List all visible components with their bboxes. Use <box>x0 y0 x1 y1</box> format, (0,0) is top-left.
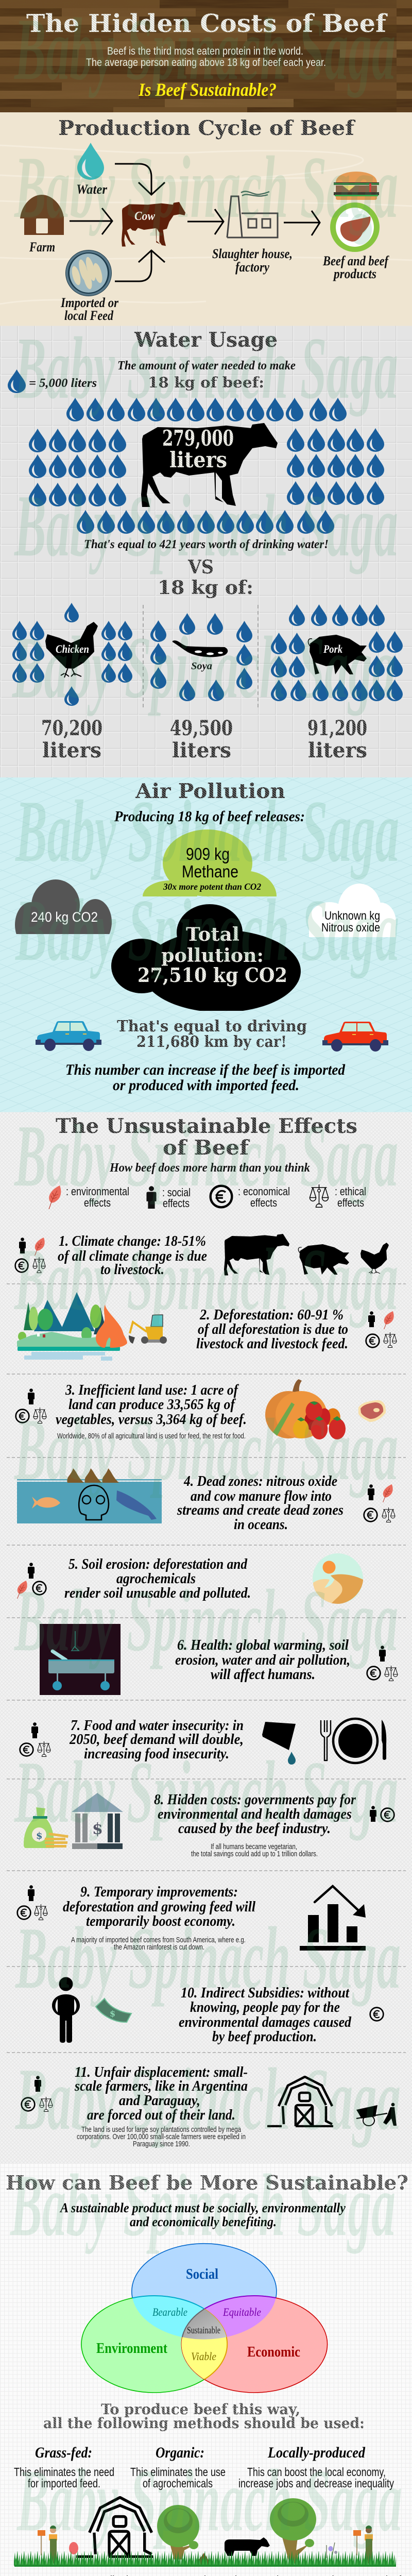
effect 10: indirect subsidies: 10. Indirect Subsidies: without <box>181 1985 350 2001</box>
intro text <box>59 2200 346 2229</box>
effect 7: food and water insecurity: increasing food insecurity. <box>84 1746 229 1762</box>
subheading: How beef does more harm than you think <box>109 1161 310 1175</box>
method: grass-fed: Grass-fed: <box>35 2444 92 2461</box>
method: locally-produced: Locally-produced <box>267 2444 366 2461</box>
subtitle question: Is Beef Sustainable? <box>138 79 277 100</box>
effect 4: dead zones <box>17 1468 395 1533</box>
effect 6: health <box>40 1624 398 1695</box>
effect 8: hidden costs: the total savings could add up to 1 trillion dollars. <box>191 1850 318 1858</box>
panel: unsustainable effects <box>0 1112 412 2164</box>
cloud: total pollution <box>111 904 301 1012</box>
arrow: factory to beef <box>284 211 320 235</box>
legend: effect types: effects <box>84 1196 111 1209</box>
icon: bank <box>72 1793 123 1849</box>
intro text: The average person eating above 18 kg of beef each year. <box>86 57 326 69</box>
arrow: farm to cow <box>70 208 112 234</box>
effect 1: climate change <box>15 1233 389 1278</box>
arrow: feed to cow <box>115 250 165 281</box>
effect 2: deforestation: 2. Deforestation: 60-91 % <box>199 1307 344 1323</box>
icon: money bag: $ <box>36 1831 43 1841</box>
subheading: 18 kg of beef: <box>148 374 264 391</box>
cloud: methane: 30x more potent than CO2 <box>163 882 261 892</box>
legend: effect types: : social <box>162 1186 191 1199</box>
stat: pork liters <box>307 716 367 762</box>
icon: steak <box>358 1400 386 1422</box>
effect 11: unfair displacement: The land is used for large soy plantations controlled by mega <box>81 2125 241 2134</box>
panel: production cycle <box>0 112 412 326</box>
chart: sustainability venn diagram: Bearable <box>152 2306 187 2318</box>
subheading: 18 kg of: 18 kg of: <box>158 577 253 599</box>
arrow: water to cow <box>115 164 165 195</box>
label: cow: Cow <box>134 210 156 223</box>
method: pasture-raised <box>12 2573 401 2576</box>
heading <box>56 1114 357 1160</box>
icon: banknote: $ <box>110 2009 115 2019</box>
pictogram: soya water <box>150 613 252 701</box>
legend: drop value <box>8 369 97 393</box>
legend: effect types: : economical <box>238 1185 290 1198</box>
icon: blue car <box>36 1021 101 1051</box>
icon: digger <box>129 1315 167 1344</box>
pictogram: soya water: Soya <box>191 660 212 672</box>
cloud: nitrous oxide: Unknown kg <box>324 909 380 922</box>
effect 10: indirect subsidies: knowing, people pay for the <box>190 1999 340 2015</box>
icon: farmer right <box>353 2526 373 2564</box>
effect 9: temporary improvements: the Amazon rainforest is cut down. <box>114 1943 204 1952</box>
method: locally-produced <box>238 2444 394 2490</box>
label: beef products <box>322 253 389 281</box>
icon: water drop <box>77 143 104 180</box>
effect 3: land use <box>16 1379 386 1440</box>
legend: drop value: = 5,000 liters <box>29 377 97 390</box>
legend: effect types: effects <box>337 1196 364 1209</box>
effect 6: health: erosion, water and air pollution, <box>175 1652 350 1668</box>
icon: flowers <box>327 2543 337 2558</box>
icon: manure <box>196 2553 210 2567</box>
icon: tree two <box>270 2498 316 2564</box>
label: slaughter house: Slaughter house, <box>212 246 293 261</box>
method: organic <box>130 2444 226 2490</box>
effect 9: temporary improvements: deforestation and growing feed will <box>63 1899 255 1915</box>
text: imported note: or produced with imported feed. <box>113 1077 299 1094</box>
stat: soya liters: liters <box>172 738 231 762</box>
label: farm: Farm <box>29 240 55 255</box>
effect 8: hidden costs <box>24 1792 394 1858</box>
intro text: and economically benefiting. <box>130 2214 277 2229</box>
icon: black cow with total: liters <box>169 447 227 472</box>
heading: Water Usage <box>134 328 278 352</box>
icon: banknote <box>96 1998 131 2022</box>
effect 7: food and water insecurity <box>20 1718 386 1765</box>
effect 2: deforestation: of all deforestation is due to <box>198 1321 348 1337</box>
effect 11: unfair displacement: are forced out of their land. <box>87 2107 235 2123</box>
effect 7: food and water insecurity: 7. Food and water insecurity: in <box>71 1718 244 1734</box>
heading: Production Cycle of Beef <box>58 116 355 140</box>
cloud: CO2 <box>15 879 112 934</box>
cloud: methane <box>143 829 277 896</box>
text: drinking water comparison: That's equal to 421 years worth of drinking water! <box>84 538 329 551</box>
method: organic: of agrochemicals <box>143 2477 213 2490</box>
stat: pork liters: 91,200 <box>307 716 367 740</box>
effect 11: unfair displacement: Paraguay since 1990. <box>133 2140 190 2148</box>
icon: desert <box>313 1553 363 1604</box>
chart: sustainability venn diagram: Economic <box>247 2344 300 2360</box>
effect 4: dead zones: 4. Dead zones: nitrous oxide <box>183 1473 337 1489</box>
effect 2: deforestation <box>17 1292 397 1361</box>
effect 5: soil erosion: agrochemicals <box>116 1571 196 1587</box>
effect 6: health: will affect humans. <box>211 1667 315 1683</box>
icon: meat <box>69 2542 78 2554</box>
chart: sustainability venn diagram: Social <box>186 2266 218 2282</box>
effect 1: climate change: 1. Climate change: 18-51% <box>59 1233 206 1249</box>
intro text: Beef is the third most eaten protein in the world. <box>107 45 303 57</box>
effect 10: indirect subsidies: environmental damages caused <box>179 2014 352 2030</box>
method: grass-fed: for imported feed. <box>28 2477 100 2490</box>
icon: meat on plate <box>330 202 380 252</box>
effect 7: food and water insecurity: 2050, beef demand will double, <box>69 1732 244 1748</box>
icon: barn <box>267 2077 333 2126</box>
effect 4: dead zones: streams and create dead zones <box>177 1502 344 1518</box>
icon: man with cart <box>356 2103 397 2126</box>
grass <box>14 2551 396 2567</box>
effect 11: unfair displacement <box>22 2064 397 2148</box>
chart: sustainability venn diagram: Sustainable <box>187 2325 220 2336</box>
method: grass-fed: This eliminates the need <box>14 2465 114 2479</box>
icon: barn <box>76 2497 153 2557</box>
method: organic: Organic: <box>156 2444 204 2461</box>
pictogram: chicken water: Chicken <box>56 642 89 655</box>
effect 11: unfair displacement: and Paraguay, <box>119 2093 200 2109</box>
icon: burning forest <box>17 1292 127 1361</box>
pictogram: chicken water <box>12 603 132 706</box>
stat: soya liters: 49,500 <box>170 716 233 740</box>
legend: effect types: : environmental <box>66 1185 129 1198</box>
text: driving comparison: 211,680 km by car! <box>136 1033 287 1051</box>
cloud: methane: Methane <box>182 862 238 881</box>
label: beef products: products <box>333 266 376 281</box>
panel: water usage <box>0 326 412 778</box>
chart: sustainability venn diagram: Viable <box>191 2350 216 2363</box>
heading: of Beef <box>163 1136 250 1160</box>
text: methods intro: To produce beef this way, <box>101 2401 300 2418</box>
cloud: methane: 909 kg <box>186 844 230 863</box>
chart: sustainability venn diagram <box>81 2244 328 2393</box>
pictogram: pork water: Pork <box>323 642 342 655</box>
effect 3: land use: vegetables, versus 3,364 kg of beef. <box>56 1412 247 1428</box>
intro text: The amount of water needed to make <box>117 359 296 372</box>
effect 11: unfair displacement: 11. Unfair displacement: small- <box>75 2064 248 2080</box>
text: driving comparison: That's equal to driving <box>117 1018 307 1036</box>
stat: chicken liters: liters <box>42 738 101 762</box>
intro text: A sustainable product must be socially, environmentally <box>59 2200 346 2215</box>
label: water: Water <box>76 182 108 197</box>
cloud: total pollution: Total <box>186 924 239 945</box>
stat: soya liters <box>170 716 233 762</box>
stat: pork liters: liters <box>308 738 367 762</box>
stat: chicken liters <box>41 716 102 762</box>
effect 2: deforestation: livestock and livestock feed. <box>196 1336 348 1352</box>
icon: black cow with total <box>141 423 278 507</box>
effect 10: indirect subsidies: by beef production. <box>212 2029 317 2045</box>
effect 10: indirect subsidies <box>52 1977 383 2045</box>
illustration: pasture farm scene <box>14 2497 396 2567</box>
cloud: total pollution: pollution: <box>161 945 264 967</box>
icon: feed bowl <box>65 250 112 296</box>
icon: vegetables <box>265 1379 346 1439</box>
label: feed <box>60 295 119 323</box>
cloud: CO2: 240 kg CO2 <box>31 909 98 925</box>
pictogram: pork water <box>271 604 403 701</box>
text: imported note: This number can increase if the beef is imported <box>65 1061 346 1078</box>
title: The Hidden Costs of Beef <box>26 9 388 38</box>
text: imported note <box>65 1061 346 1094</box>
heading: Air Pollution <box>135 779 285 803</box>
effect 1: climate change: to livestock. <box>100 1262 164 1278</box>
effect 9: temporary improvements: temporarily boost economy. <box>86 1913 235 1929</box>
text: versus: VS <box>187 556 214 578</box>
icon: empty water bag <box>262 1722 296 1765</box>
cloud: total pollution: 27,510 kg CO2 <box>138 963 287 987</box>
effect 3: land use: 3. Inefficient land use: 1 acre of <box>65 1382 239 1398</box>
effect 5: soil erosion <box>18 1553 363 1604</box>
chart: sustainability venn diagram: Equitable <box>222 2306 261 2318</box>
effect 1: climate change: of all climate change is due <box>58 1248 207 1264</box>
icon: declining chart <box>300 1886 366 1951</box>
icon: black cow <box>225 2537 270 2556</box>
panel: how to be more sustainable <box>0 2164 412 2576</box>
icon: bank: $ <box>92 1820 103 1838</box>
legend: effect types: effects <box>250 1196 277 1209</box>
effect 3: land use: land can produce 33,565 kg of <box>68 1397 236 1413</box>
chart: sustainability venn diagram: Environment <box>96 2341 168 2357</box>
effect 9: temporary improvements <box>18 1884 366 1952</box>
cloud: nitrous oxide <box>308 884 396 942</box>
effect 9: temporary improvements: 9. Temporary improvements: <box>80 1884 238 1900</box>
label: feed: Imported or <box>60 295 119 310</box>
effect 4: dead zones: in oceans. <box>234 1517 288 1533</box>
icon: tree one <box>157 2505 199 2560</box>
icon: burger <box>334 172 379 200</box>
icon: factory <box>227 191 278 238</box>
effect 8: hidden costs: If all humans became vegetarian, <box>211 1842 297 1851</box>
label: slaughter house <box>212 246 293 275</box>
pictogram: water drops around cow <box>29 398 384 534</box>
method: organic: This eliminates the use <box>130 2465 226 2479</box>
effect 9: temporary improvements: A majority of imported beef comes from South America, where e.g. <box>71 1936 246 1944</box>
method: grass-fed <box>14 2444 114 2490</box>
label: beef products: Beef and beef <box>322 253 389 268</box>
effect 8: hidden costs: caused by the beef industry. <box>178 1821 331 1837</box>
effect 8: hidden costs: environmental and health damages <box>158 1806 352 1822</box>
text: methods intro <box>43 2401 365 2432</box>
intro text <box>86 45 326 69</box>
panel: header wood <box>0 0 412 112</box>
effect 5: soil erosion: render soil unusable and polluted. <box>64 1585 251 1601</box>
legend: effect types: : ethical <box>335 1185 366 1198</box>
icon: person with pockets <box>52 1977 80 2043</box>
icon: money bag <box>24 1807 68 1848</box>
icon: cow <box>122 202 185 246</box>
effect 11: unfair displacement: scale farmers, like in Argentina <box>74 2078 248 2094</box>
icon: farm <box>20 195 64 235</box>
effect 5: soil erosion: 5. Soil erosion: deforestation and <box>68 1556 248 1572</box>
text: methods intro: all the following methods should be used: <box>43 2415 365 2432</box>
effect 6: health: 6. Health: global warming, soil <box>177 1637 349 1653</box>
label: feed: local Feed <box>64 308 114 323</box>
effect 8: hidden costs: 8. Hidden costs: governments pay for <box>154 1792 356 1808</box>
text: driving comparison <box>117 1018 307 1051</box>
cloud: nitrous oxide: Nitrous oxide <box>321 921 380 934</box>
intro text: Producing 18 kg of beef releases: <box>114 809 305 825</box>
heading: The Unsustainable Effects <box>56 1114 357 1138</box>
icon: black cow with total: 279,000 <box>162 426 234 451</box>
icon: farmer left <box>38 2526 57 2564</box>
arrow: cow to factory <box>187 209 224 234</box>
icon: empty plate <box>321 1719 386 1763</box>
heading: How can Beef be More Sustainable? <box>6 2171 408 2194</box>
label: slaughter house: factory <box>235 260 269 275</box>
legend: effect types: effects <box>163 1197 190 1210</box>
panel: air pollution <box>0 777 412 1112</box>
icon: polluted ocean <box>17 1468 162 1523</box>
effect 4: dead zones: and cow manure flow into <box>191 1488 332 1504</box>
stat: chicken liters: 70,200 <box>41 716 102 740</box>
effect 11: unfair displacement: corporations. Over 100,000 small-scale farmers were expelled in <box>77 2132 246 2141</box>
effect 3: land use: Worldwide, 80% of all agricultural land is used for feed, the rest for food. <box>57 1432 246 1440</box>
icon: hospital bed <box>40 1624 121 1695</box>
icon: red car <box>322 1022 388 1052</box>
legend: effect types <box>49 1184 366 1210</box>
